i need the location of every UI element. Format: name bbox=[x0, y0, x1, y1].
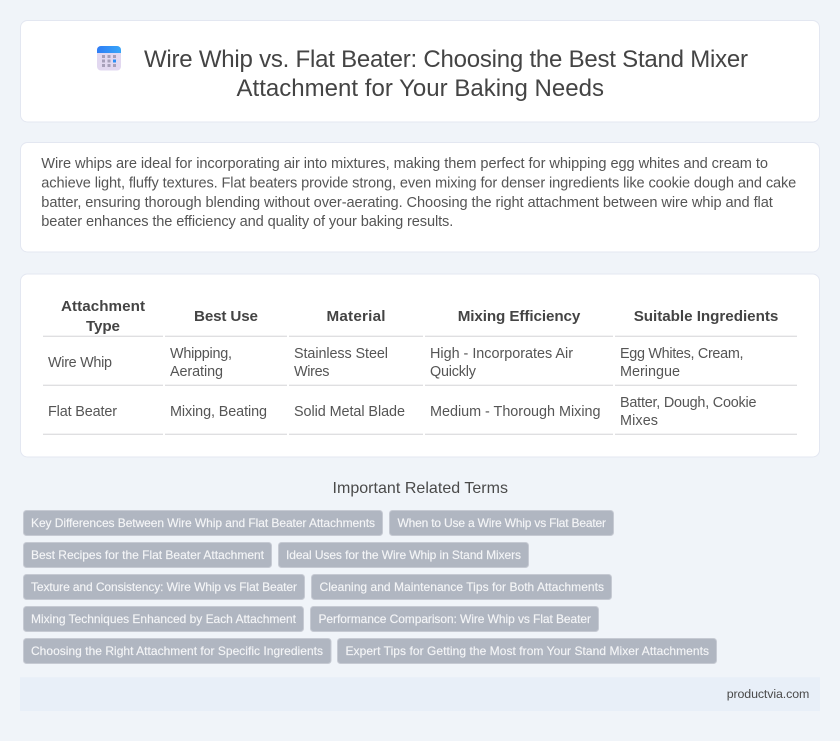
text block: summary: Wire whips are ideal for incorporating air into mixtures, making them perfect for whipping egg whites and cream to bbox=[41, 156, 768, 172]
tag bbox=[24, 542, 272, 568]
table header: Material bbox=[326, 308, 386, 325]
table row: flat beater: Mixes bbox=[620, 413, 658, 429]
table row: flat beater: Medium - Thorough Mixing bbox=[430, 404, 600, 420]
icon: calendar bbox=[97, 46, 121, 70]
text block: summary: batter, ensuring thorough blending without over-aerating. Choosing the right attachment between wire whip and flat bbox=[41, 195, 773, 211]
tag bbox=[310, 606, 598, 632]
tag: Expert Tips for Getting the Most from Your Stand Mixer Attachments bbox=[346, 644, 709, 658]
panel: summary paragraph bbox=[20, 142, 820, 252]
table header: Attachment bbox=[61, 298, 145, 315]
tag: Best Recipes for the Flat Beater Attachment bbox=[31, 548, 265, 562]
table header: Suitable Ingredients bbox=[634, 308, 778, 325]
tag bbox=[24, 510, 382, 536]
tag: Ideal Uses for the Wire Whip in Stand Mixers bbox=[286, 548, 521, 562]
table row: wire whip: Meringue bbox=[620, 364, 680, 380]
tag bbox=[24, 606, 304, 632]
title: Attachment for Your Baking Needs bbox=[236, 75, 604, 102]
title: Wire Whip vs. Flat Beater: Choosing the Best Stand Mixer bbox=[144, 46, 748, 73]
table row: wire whip: Quickly bbox=[430, 364, 477, 380]
tag: Texture and Consistency: Wire Whip vs Flat Beater bbox=[31, 580, 297, 594]
tag: Cleaning and Maintenance Tips for Both Attachments bbox=[320, 580, 604, 594]
tag bbox=[278, 542, 528, 568]
heading: related terms: Important Related Terms bbox=[332, 480, 508, 497]
tag bbox=[24, 638, 331, 664]
table row: flat beater: Flat Beater bbox=[48, 404, 117, 420]
tag: Performance Comparison: Wire Whip vs Flat Beater bbox=[318, 612, 591, 626]
text block: summary: achieve light, fluffy textures. Flat beaters provide strong, even mixing for denser ingredients like cookie dough and cake bbox=[41, 175, 796, 191]
panel: header bbox=[20, 20, 820, 122]
table header bbox=[61, 298, 778, 335]
title bbox=[144, 46, 748, 102]
tag bbox=[390, 510, 614, 536]
table row: wire whip: Egg Whites, Cream, bbox=[620, 346, 744, 362]
table row: wire whip: High - Incorporates Air bbox=[430, 346, 573, 362]
tag bbox=[338, 638, 716, 664]
table row: flat beater: Mixing, Beating bbox=[170, 404, 267, 420]
table row: flat beater bbox=[48, 395, 756, 429]
tag bbox=[24, 574, 304, 600]
tag: When to Use a Wire Whip vs Flat Beater bbox=[398, 516, 606, 530]
table row: flat beater: Solid Metal Blade bbox=[294, 404, 405, 420]
tag bbox=[312, 574, 612, 600]
text block: summary: beater enhances the efficiency and quality of your baking results. bbox=[41, 214, 453, 230]
table row: wire whip: Wire Whip bbox=[48, 355, 112, 371]
table row: wire whip: Wires bbox=[294, 364, 330, 380]
tag: Mixing Techniques Enhanced by Each Attachment bbox=[31, 612, 297, 626]
table row: wire whip: Stainless Steel bbox=[294, 346, 388, 362]
table header: Best Use bbox=[194, 308, 258, 325]
table header: Type bbox=[86, 318, 120, 335]
panel: related term tags bbox=[24, 510, 716, 664]
tag: Key Differences Between Wire Whip and Flat Beater Attachments bbox=[31, 516, 375, 530]
table row: wire whip: Whipping, bbox=[170, 346, 232, 362]
table row: wire whip: Aerating bbox=[170, 364, 223, 380]
tag: Choosing the Right Attachment for Specific Ingredients bbox=[31, 644, 323, 658]
footer bbox=[20, 677, 820, 711]
text block: summary bbox=[41, 156, 796, 230]
table row: wire whip bbox=[48, 346, 744, 380]
table row: flat beater: Batter, Dough, Cookie bbox=[620, 395, 756, 411]
table header: Mixing Efficiency bbox=[458, 308, 581, 325]
footer source text: productvia.com bbox=[727, 687, 809, 701]
panel: comparison table bbox=[20, 274, 820, 457]
